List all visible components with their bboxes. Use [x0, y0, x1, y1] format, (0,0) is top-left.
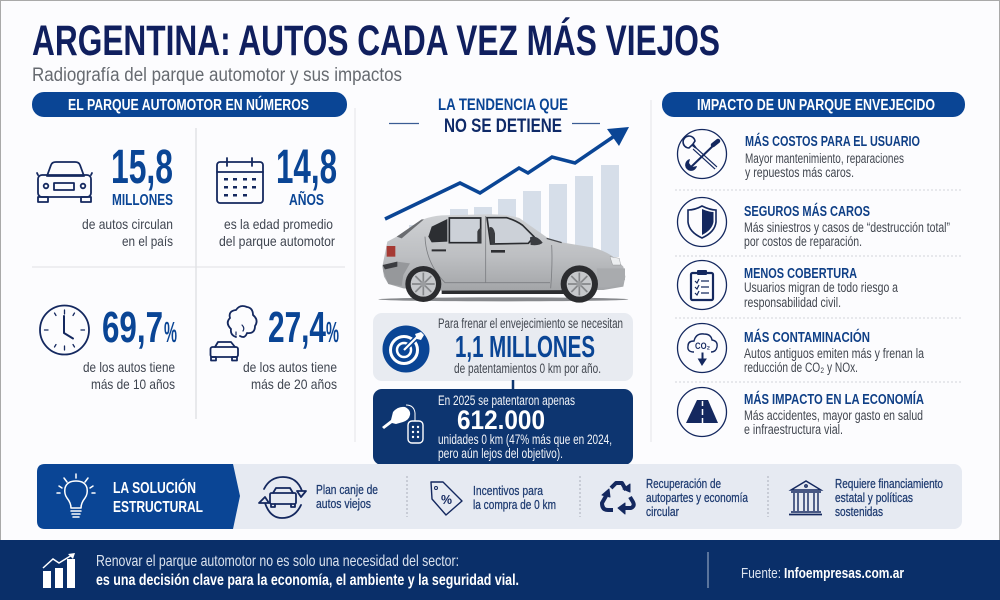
- icon: smoky car: [210, 306, 257, 360]
- icon: car: [37, 162, 92, 202]
- solution: plan canje: Plan canje de: [316, 482, 378, 497]
- icon: calendar: [217, 158, 263, 203]
- icon: car key: [382, 405, 423, 443]
- stat: 15,8 millones: MILLONES: [112, 192, 173, 209]
- impact item: contaminación: [678, 324, 924, 375]
- solution: incentivos: [431, 482, 556, 515]
- arrow: rising trend: [385, 127, 629, 219]
- impact item: costos: MÁS COSTOS PARA EL USUARIO: [745, 133, 920, 150]
- solution: recuperación: circular: [646, 504, 680, 519]
- impact item: economía: Más accidentes, mayor gasto en salud: [744, 408, 923, 423]
- impact item: costos: Mayor mantenimiento, reparaciones: [745, 151, 904, 166]
- source: Fuente:: [741, 565, 781, 582]
- icon: tools: [678, 130, 726, 178]
- icon: bank building: [789, 481, 822, 514]
- icon: shield: [678, 198, 726, 246]
- callout: 612.000: 612.000: [457, 405, 545, 435]
- callout: 1,1 millones: [373, 313, 633, 381]
- stat: 27,4%: 27,4: [268, 303, 326, 352]
- callout: 1,1 millones: de patentamientos 0 km por año.: [454, 361, 601, 376]
- impact item: cobertura: MENOS COBERTURA: [744, 266, 857, 282]
- footer: [0, 540, 1000, 600]
- impact item: contaminación: MÁS CONTAMINACIÓN: [744, 328, 870, 346]
- stat: 69,7%: más de 10 años: [91, 376, 175, 392]
- icon: target: [382, 326, 430, 372]
- solution: financiamiento: Requiere financiamiento: [835, 476, 943, 491]
- stat: 69,7%: 69,7: [102, 303, 163, 352]
- connector: [512, 380, 514, 390]
- solution: plan canje: autos viejos: [316, 496, 371, 511]
- callout: 612.000: pero aún lejos del objetivo).: [438, 446, 563, 461]
- stat: 69,7%: %: [164, 317, 177, 349]
- stat: 15,8 millones: de autos circulan: [82, 216, 173, 232]
- icon: car swap: [259, 477, 306, 518]
- solution: recuperación: Recuperación de: [646, 476, 721, 491]
- panel: el parque automotor en números: [32, 92, 355, 442]
- impact item: economía: [678, 388, 924, 437]
- panel heading: números: EL PARQUE AUTOMOTOR EN NÚMEROS: [68, 96, 309, 114]
- panel: la solución estructural: [37, 464, 962, 529]
- impact item: seguros: por costos de reparación.: [744, 234, 862, 249]
- panel: impacto de un parque envejecido: [662, 92, 965, 437]
- stat: 14,8 años: [217, 141, 337, 249]
- solution label: [37, 464, 240, 529]
- heading: la tendencia que no se detiene: NO SE DETIENE: [444, 116, 562, 137]
- solution: recuperación: [602, 476, 749, 519]
- callout: 612.000: [373, 389, 633, 465]
- source: Infoempresas.com.ar: [784, 565, 904, 582]
- icon: light bulb: [57, 474, 95, 517]
- impact item: economía: e infraestructura vial.: [744, 422, 843, 437]
- solution label: ESTRUCTURAL: [113, 499, 203, 516]
- icon: recycle: [602, 483, 634, 514]
- stat: 27,4%: más de 20 años: [251, 376, 337, 392]
- impact item: costos: [678, 130, 920, 180]
- stat: 14,8 años: 14,8: [276, 141, 337, 194]
- source: [741, 565, 904, 582]
- car illustration: [378, 214, 628, 303]
- stat: 27,4%: %: [326, 317, 339, 349]
- panel heading: impacto: IMPACTO DE UN PARQUE ENVEJECIDO: [697, 97, 935, 114]
- stat: 15,8 millones: 15,8: [111, 141, 173, 194]
- stat: 14,8 años: es la edad promedio: [224, 216, 333, 232]
- subtitle: Radiografía del parque automotor y sus impactos: [32, 65, 402, 86]
- title: ARGENTINA: AUTOS CADA VEZ MÁS VIEJOS: [32, 17, 720, 65]
- impact item: contaminación: Autos antiguos emiten más y frenan la: [744, 346, 924, 361]
- footer: Renovar el parque automotor no es solo una necesidad del sector:: [96, 553, 459, 570]
- impact item: seguros: [678, 198, 950, 249]
- callout: 612.000: En 2025 se patentaron apenas: [438, 393, 575, 408]
- solution: recuperación: autopartes y economía: [646, 490, 749, 505]
- heading: la tendencia que no se detiene: LA TENDENCIA QUE: [438, 95, 568, 114]
- icon: clock: [40, 306, 89, 354]
- panel heading: impacto: [662, 92, 965, 117]
- solution: incentivos: la compra de 0 km: [473, 497, 556, 512]
- stat: 15,8 millones: [37, 141, 173, 249]
- solution label: LA SOLUCIÓN: [113, 478, 196, 497]
- stat: 14,8 años: AÑOS: [289, 189, 324, 209]
- panel: la tendencia: [373, 95, 633, 465]
- solution: financiamiento: sostenidas: [835, 504, 883, 519]
- stat: 69,7%: [40, 303, 177, 392]
- callout: 1,1 millones: 1,1 MILLONES: [455, 329, 595, 364]
- stat: 27,4%: de los autos tiene: [243, 359, 337, 375]
- footer: es una decisión clave para la economía, el ambiente y la seguridad vial.: [96, 572, 519, 589]
- panel heading: números: [32, 92, 347, 117]
- impact item: seguros: SEGUROS MÁS CAROS: [744, 203, 870, 220]
- impact item: costos: y repuestos más caros.: [745, 165, 854, 180]
- icon: clipboard: [678, 260, 726, 310]
- icon: CO2 cloud: [678, 324, 726, 372]
- impact item: contaminación: reducción de CO₂ y NOx.: [744, 360, 858, 375]
- solution: plan canje: [259, 477, 378, 518]
- solution: financiamiento: estatal y políticas: [835, 490, 913, 505]
- solution: financiamiento: [789, 476, 943, 519]
- impact item: cobertura: responsabilidad civil.: [744, 295, 841, 310]
- impact item: cobertura: [678, 260, 898, 310]
- callout: 1,1 millones: Para frenar el envejecimiento se necesitan: [438, 316, 623, 331]
- stat: 15,8 millones: en el país: [122, 233, 173, 249]
- icon: road: [678, 388, 726, 436]
- impact item: cobertura: Usuarios migran de todo riesgo a: [744, 280, 898, 295]
- bar chart: [409, 165, 619, 257]
- stat: 27,4%: [210, 303, 339, 392]
- icon: growth chart: [43, 553, 75, 588]
- icon: discount tag: %: [441, 492, 452, 507]
- stat: 69,7%: de los autos tiene: [83, 359, 175, 375]
- impact item: economía: MÁS IMPACTO EN LA ECONOMÍA: [744, 391, 924, 408]
- solution: incentivos: Incentivos para: [473, 483, 544, 498]
- callout: 612.000: unidades 0 km (47% más que en 2024,: [438, 432, 612, 447]
- icon: CO2 cloud: CO₂: [695, 341, 710, 351]
- stat: 14,8 años: del parque automotor: [219, 233, 335, 249]
- heading: la tendencia que no se detiene: [389, 95, 600, 137]
